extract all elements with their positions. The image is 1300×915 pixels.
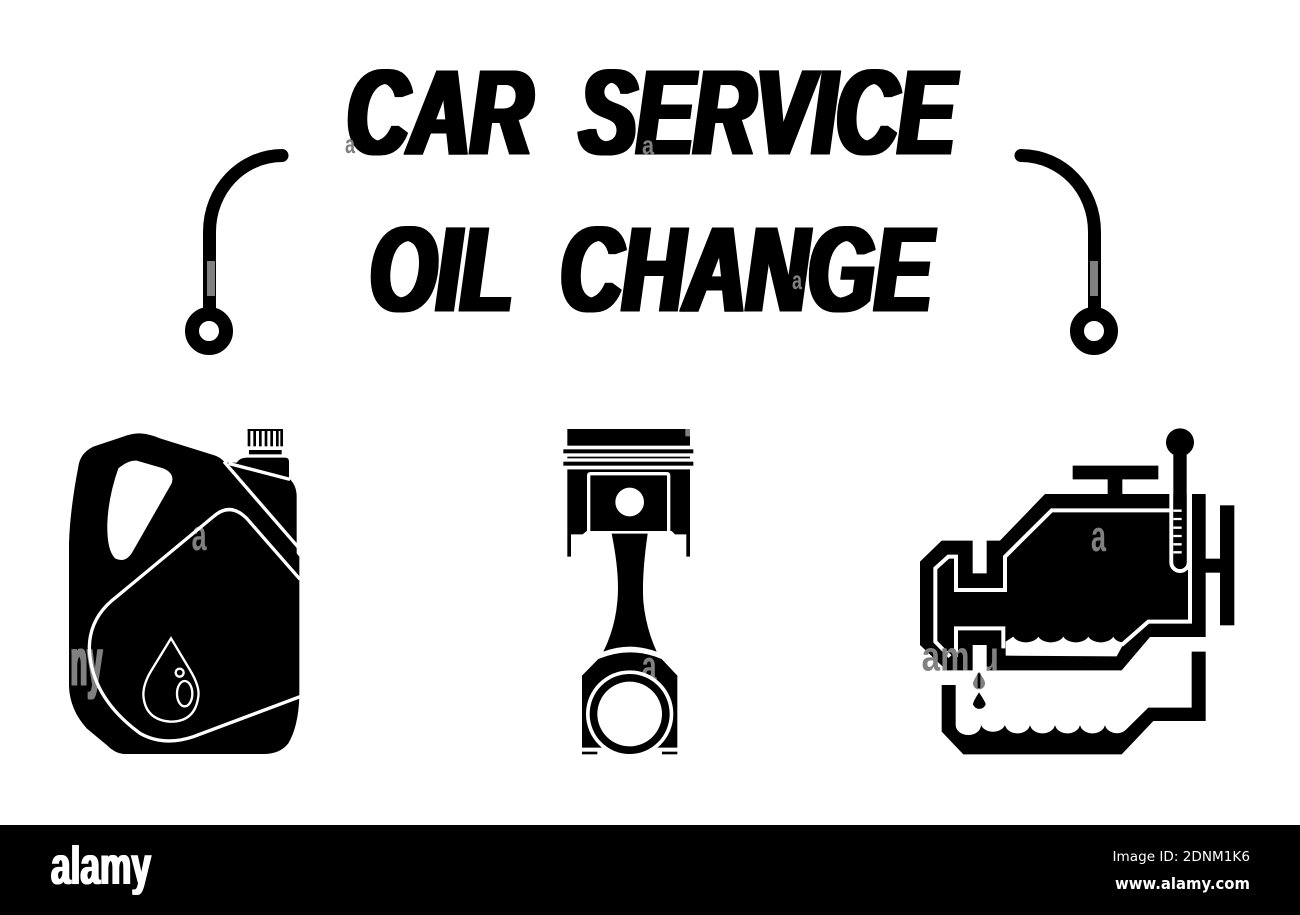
title bbox=[347, 44, 957, 337]
icon: piston: a bbox=[642, 642, 657, 691]
right bracket bbox=[1021, 156, 1111, 348]
footer bar bbox=[0, 825, 1300, 915]
icon: oil canister: ny bbox=[71, 626, 102, 700]
title watermark marks: a bbox=[345, 129, 355, 159]
title watermark marks: a bbox=[642, 130, 654, 160]
title watermark marks bbox=[345, 129, 802, 295]
icon: engine with oil drip bbox=[920, 428, 1234, 754]
title: OIL CHANGE bbox=[370, 201, 934, 337]
image id: Image ID: 2DNM1K6 bbox=[1112, 850, 1250, 865]
icon: oil canister: a bbox=[192, 511, 207, 560]
title watermark marks: a bbox=[792, 265, 802, 295]
icon: oil canister bbox=[69, 429, 300, 754]
icon: engine with oil drip: a bbox=[1091, 512, 1106, 561]
footer logo: alamy bbox=[51, 836, 151, 896]
website: www.alamy.com bbox=[1115, 874, 1250, 893]
left bracket bbox=[192, 156, 282, 348]
title: CAR SERVICE bbox=[347, 44, 957, 180]
icon: piston bbox=[563, 429, 693, 758]
icon: engine with oil drip: am u bbox=[922, 632, 999, 679]
